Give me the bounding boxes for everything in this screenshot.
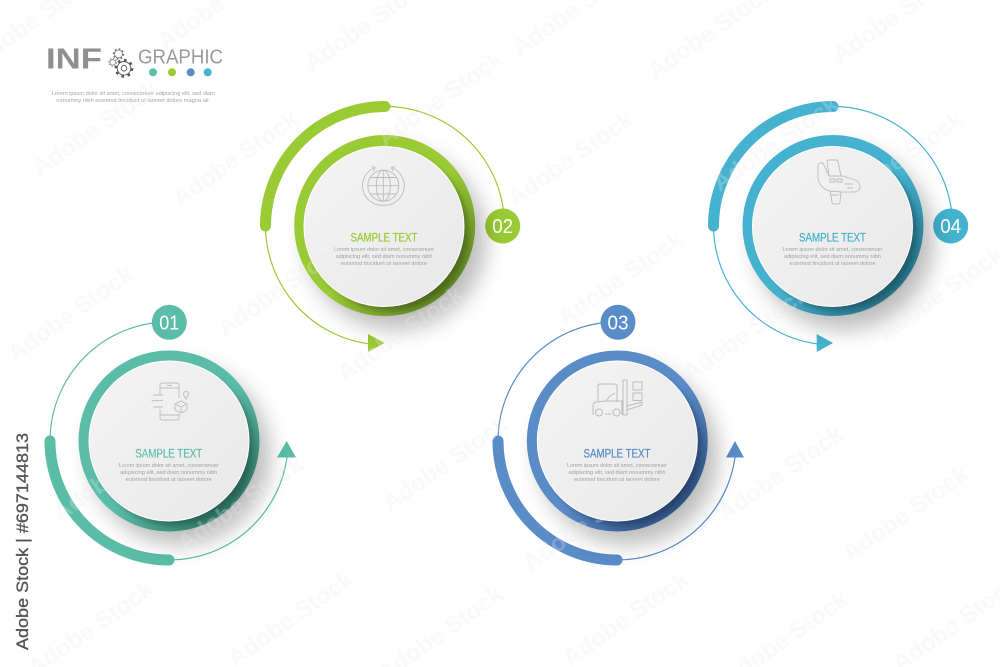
panel: step 02 — [266, 106, 520, 352]
body text 02: euismod tincidunt ut laoreet dolore — [341, 261, 427, 267]
inner disc — [752, 146, 912, 306]
inner disc — [89, 361, 249, 521]
watermark pattern: Adobe Stock — [518, 470, 654, 577]
outer arc with arrow — [498, 322, 744, 560]
icon: phone with parcel — [152, 383, 188, 420]
icon: forklift — [593, 380, 642, 416]
body text 01: Lorem ipsum dolor sit amet, consectetuer — [119, 463, 219, 469]
body text 01: adipiscing elit, sed diam nonummy nibh — [120, 470, 217, 476]
watermark pattern: Adobe Stock — [373, 45, 509, 152]
ring with shadow — [742, 135, 934, 330]
logo caption — [52, 91, 215, 104]
logo caption: Lorem ipsum dolor sit amet, consectetuer adipiscing elit, sed diam — [52, 91, 215, 97]
vertical stock id label: Adobe Stock | #697144813 — [13, 433, 32, 650]
logo caption: nonummy nibh euismod tincidunt ut laoreet dolore magna ali- — [56, 98, 210, 104]
body text 01: euismod tincidunt ut laoreet dolore — [126, 477, 212, 483]
body text 03: Lorem ipsum dolor sit amet, consectetuer — [567, 463, 667, 469]
watermark pattern: Adobe Stock — [48, 420, 184, 527]
number badge 03: 03 — [608, 312, 628, 334]
body text 04: adipiscing elit, sed diam nonummy nibh — [784, 254, 881, 260]
watermark pattern: Adobe Stock — [833, 105, 969, 212]
number badge 01 — [152, 305, 187, 340]
body text 04 — [782, 247, 883, 267]
number badge 02: 02 — [492, 216, 513, 238]
outer arc with arrow — [714, 106, 952, 352]
heading 03: SAMPLE TEXT — [584, 446, 650, 460]
watermark pattern: Adobe Stock — [503, 105, 639, 212]
watermark pattern: Adobe Stock — [3, 260, 139, 367]
body text 04: Lorem ipsum dolor sit amet, consectetuer — [782, 247, 883, 253]
ring with shadow — [294, 135, 486, 330]
icon: gears — [109, 49, 132, 76]
outer arc with arrow — [266, 106, 504, 352]
heading 01: SAMPLE TEXT — [135, 446, 202, 460]
panel: step 03 — [498, 305, 744, 560]
outer arc with arrow — [50, 322, 296, 560]
logo: infographic title — [46, 44, 223, 104]
number badge 04 — [933, 208, 968, 244]
body text 03: euismod tincidunt ut laoreet dolore — [574, 477, 660, 483]
watermark pattern: Adobe Stock — [378, 410, 514, 517]
body text 02: Lorem ipsum dolor sit amet, consectetuer — [334, 247, 434, 253]
ring with shadow — [78, 350, 270, 545]
watermark pattern: Adobe Stock — [28, 75, 164, 182]
watermark pattern: Adobe Stock — [173, 450, 309, 557]
watermark pattern: Adobe Stock — [708, 90, 844, 197]
icon: airplane — [818, 160, 860, 204]
watermark pattern: Adobe Stock — [713, 420, 849, 527]
inner disc — [537, 361, 697, 521]
heading 02: SAMPLE TEXT — [350, 230, 418, 244]
panel: step 01 — [50, 305, 296, 560]
watermark pattern: Adobe Stock — [838, 460, 974, 567]
watermark pattern: Adobe Stock — [213, 235, 349, 342]
heading 04: SAMPLE TEXT — [799, 230, 866, 244]
logo word GRAPHIC: GRAPHIC — [138, 46, 223, 68]
body text 03: adipiscing elit, sed diam nonummy nibh — [568, 470, 666, 476]
number badge 04: 04 — [940, 216, 961, 238]
inner disc — [304, 146, 464, 306]
panel: step 04 — [714, 106, 968, 352]
watermark pattern: Adobe Stock — [553, 225, 689, 332]
body text 02: adipiscing elit, sed diam nonummy nibh — [336, 254, 432, 260]
watermark pattern: Adobe Stock — [333, 280, 469, 387]
icon: globe with arrows — [362, 166, 404, 205]
watermark pattern: Adobe Stock — [678, 280, 814, 387]
number badge 03 — [600, 305, 636, 340]
logo word INF: INF — [46, 44, 102, 76]
body text 04: euismod tincidunt ut laoreet dolore — [790, 261, 876, 267]
body text 02 — [334, 247, 434, 267]
body text 03 — [567, 463, 667, 483]
watermark pattern: Adobe Stock — [168, 105, 304, 212]
ring with shadow — [527, 350, 718, 545]
number badge 02 — [485, 208, 520, 244]
number badge 01: 01 — [159, 312, 179, 334]
body text 01 — [119, 463, 219, 483]
logo colour dots — [149, 68, 212, 76]
